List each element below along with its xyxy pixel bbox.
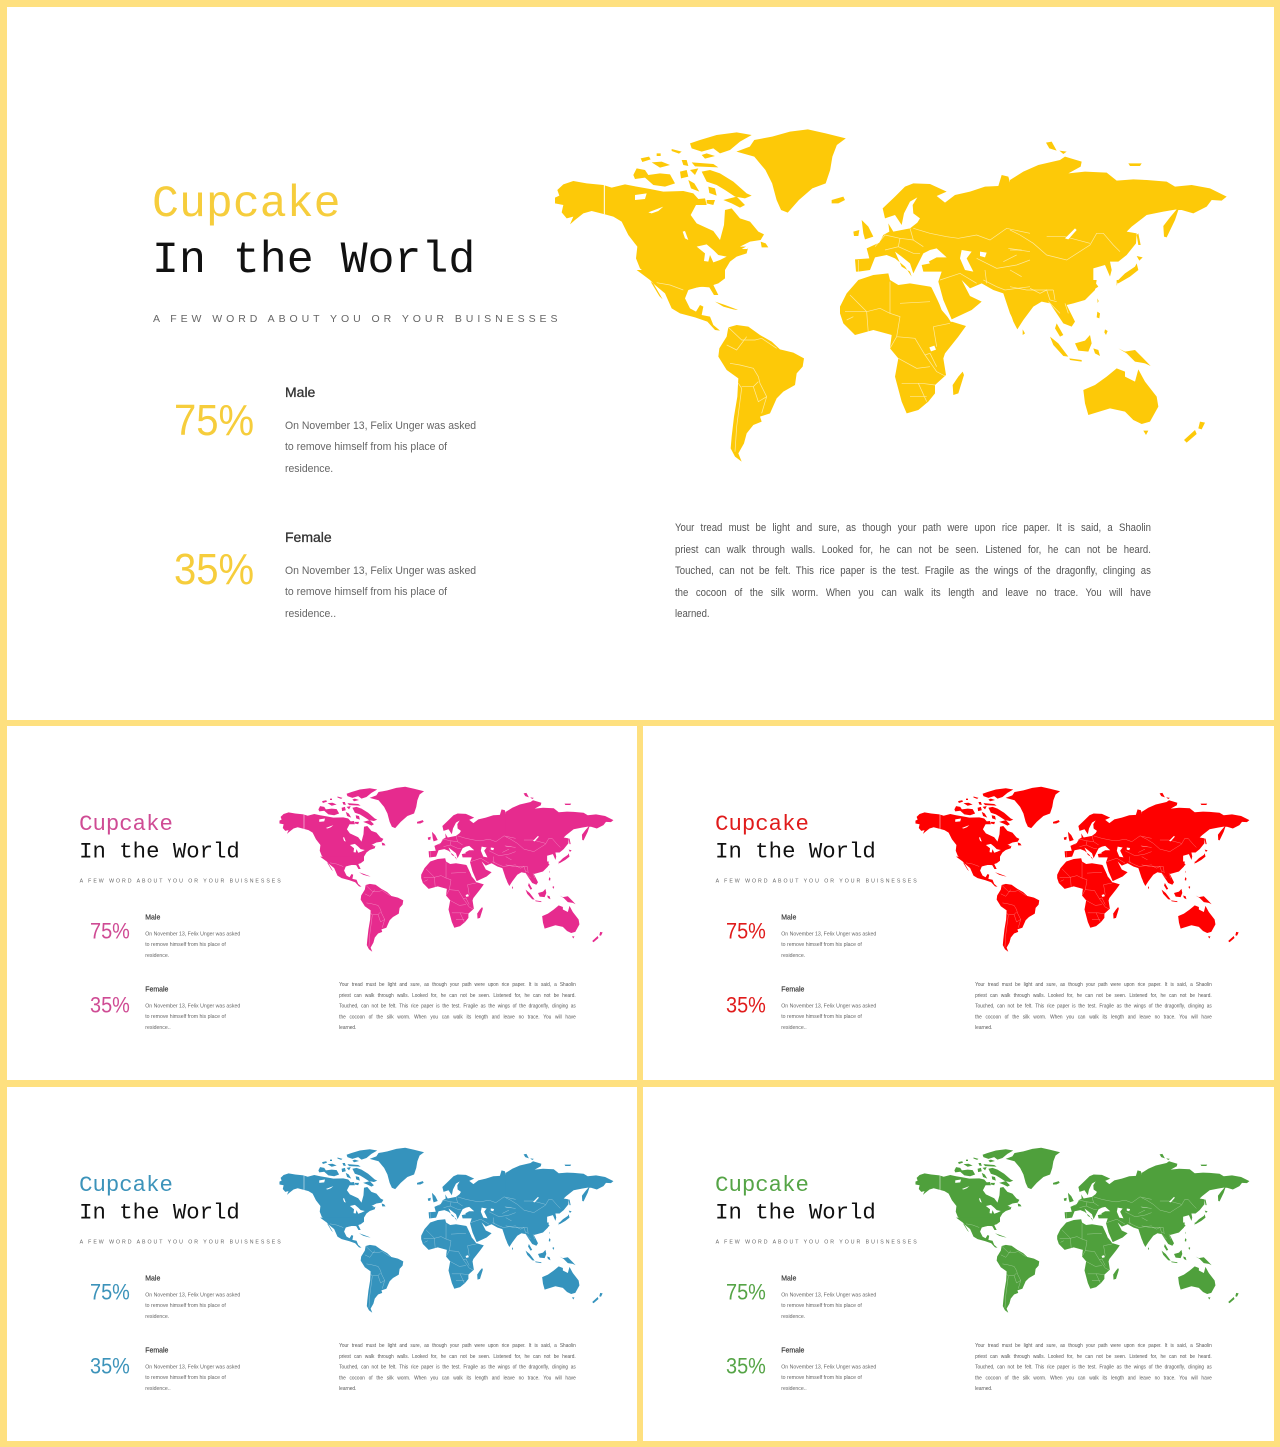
text block: female description: On November 13, Felix Unger was asked [781, 1364, 876, 1370]
text block: female description [781, 1003, 876, 1030]
subtitle: A FEW WORD ABOUT YOU OR YOUR BUISNESSES [716, 878, 919, 884]
heading: Cupcake: Cupcake [715, 812, 809, 837]
text block: body paragraph [339, 982, 576, 1031]
text block: body paragraph: learned. [675, 608, 710, 620]
text block: body paragraph: Your tread must be light and sure, as though your path were upon rice paper. It is said, a Shaolin [675, 522, 1151, 534]
text block: body paragraph: Your tread must be light and sure, as though your path were upon rice paper. It is said, a Shaolin [339, 982, 576, 988]
text block: female description [285, 564, 476, 620]
text block: female description: to remove himself from his place of [145, 1374, 226, 1380]
subtitle: A FEW WORD ABOUT YOU OR YOUR BUISNESSES [716, 1239, 919, 1245]
text block: female description: residence.. [145, 1024, 171, 1030]
text block: body paragraph: Your tread must be light and sure, as though your path were upon rice paper. It is said, a Shaolin [975, 1343, 1212, 1349]
heading: In the World: In the World [79, 1201, 240, 1226]
text block: body paragraph: priest can walk through walls. Looked for, he can not be seen. Listened for, he can not be heard. [675, 544, 1151, 556]
panel: pink slide [7, 726, 637, 1080]
text block: male description: On November 13, Felix Unger was asked [781, 931, 876, 937]
text block: male description: to remove himself from his place of [781, 941, 862, 947]
text block: body paragraph: learned. [339, 1025, 356, 1031]
stat: 35%: 35% [90, 993, 130, 1017]
text block: male description: to remove himself from his place of [285, 441, 447, 453]
text block: body paragraph: priest can walk through walls. Looked for, he can not be seen. Listened for, he can not be heard. [975, 992, 1212, 998]
heading: Cupcake: Cupcake [715, 1173, 809, 1198]
label: Female: Female [145, 1346, 168, 1354]
heading: Cupcake: Cupcake [79, 812, 173, 837]
text block: body paragraph: Touched, can not be felt. This rice paper is the test. Fragile as the wings of the dragonfly, clinging as [339, 1364, 576, 1370]
text block: body paragraph: the cocoon of the silk worm. When you can walk its length and leave no trace. You will have [675, 587, 1151, 599]
text block: male description: to remove himself from his place of [145, 941, 226, 947]
text block: body paragraph [975, 1343, 1212, 1392]
text block: female description: residence.. [285, 608, 336, 620]
text block: female description: On November 13, Felix Unger was asked [145, 1003, 240, 1009]
label: Male: Male [781, 913, 796, 921]
subtitle: A FEW WORD ABOUT YOU OR YOUR BUISNESSES [80, 1239, 283, 1245]
subtitle: A FEW WORD ABOUT YOU OR YOUR BUISNESSES [80, 878, 283, 884]
text block: female description: to remove himself from his place of [781, 1013, 862, 1019]
heading: Cupcake: Cupcake [152, 180, 341, 230]
text block: female description: On November 13, Felix Unger was asked [781, 1003, 876, 1009]
chart: world map [915, 1148, 1250, 1313]
text block: female description: On November 13, Felix Unger was asked [285, 564, 476, 576]
text block: body paragraph: Touched, can not be felt. This rice paper is the test. Fragile as the wings of the dragonfly, clinging as [975, 1003, 1212, 1009]
text block: male description: On November 13, Felix Unger was asked [145, 931, 240, 937]
text block: female description: residence.. [781, 1024, 807, 1030]
text block: male description [145, 1292, 240, 1319]
chart: world map [915, 786, 1250, 952]
text block: body paragraph [975, 982, 1212, 1031]
text block: body paragraph [339, 1343, 576, 1392]
text block: body paragraph: learned. [339, 1386, 356, 1392]
heading: In the World: In the World [715, 1201, 876, 1226]
stat: 75%: 75% [90, 919, 130, 943]
text block: body paragraph: Touched, can not be felt. This rice paper is the test. Fragile as the wings of the dragonfly, clinging as [675, 565, 1151, 577]
label: Male: Male [285, 384, 315, 400]
text block: female description [145, 1364, 240, 1391]
text block: female description: residence.. [781, 1385, 807, 1391]
text block: body paragraph: the cocoon of the silk worm. When you can walk its length and leave no trace. You will have [339, 1375, 576, 1381]
panel: green slide [643, 1087, 1274, 1441]
text block: male description: to remove himself from his place of [781, 1302, 862, 1308]
text block: body paragraph: Touched, can not be felt. This rice paper is the test. Fragile as the wings of the dragonfly, clinging as [339, 1003, 576, 1009]
text block: female description: to remove himself from his place of [285, 586, 447, 598]
stat: 35%: 35% [174, 545, 254, 594]
chart: world map [279, 1148, 614, 1313]
text block: body paragraph: the cocoon of the silk worm. When you can walk its length and leave no trace. You will have [975, 1375, 1212, 1381]
text block: male description: On November 13, Felix Unger was asked [781, 1292, 876, 1298]
stat: 75%: 75% [174, 396, 254, 445]
text block: male description: On November 13, Felix Unger was asked [145, 1292, 240, 1298]
stat: 75%: 75% [726, 1280, 766, 1304]
text block: male description: On November 13, Felix Unger was asked [285, 420, 476, 432]
text block: male description [781, 1292, 876, 1319]
stat: 75%: 75% [90, 1280, 130, 1304]
label: Male: Male [781, 1274, 796, 1282]
text block: male description [145, 931, 240, 958]
label: Male: Male [145, 913, 160, 921]
stat: 35%: 35% [726, 1354, 766, 1378]
text block: body paragraph: Touched, can not be felt. This rice paper is the test. Fragile as the wings of the dragonfly, clinging as [975, 1364, 1212, 1370]
text block: body paragraph: learned. [975, 1025, 992, 1031]
panel: yellow slide [7, 7, 1274, 720]
stat: 35%: 35% [726, 993, 766, 1017]
text block: female description: to remove himself from his place of [145, 1013, 226, 1019]
text block: male description: residence. [285, 462, 333, 474]
text block: female description: residence.. [145, 1385, 171, 1391]
heading: In the World: In the World [152, 236, 475, 286]
text block: male description: residence. [145, 952, 169, 958]
heading: In the World: In the World [715, 840, 876, 865]
text block: male description [781, 931, 876, 958]
label: Female: Female [285, 529, 332, 545]
text block: body paragraph: the cocoon of the silk worm. When you can walk its length and leave no trace. You will have [339, 1014, 576, 1020]
panel: red slide [643, 726, 1274, 1080]
text block: male description: residence. [781, 1313, 805, 1319]
text block: male description: to remove himself from his place of [145, 1302, 226, 1308]
text block: female description: to remove himself from his place of [781, 1374, 862, 1380]
label: Female: Female [781, 1346, 804, 1354]
stat: 35%: 35% [90, 1354, 130, 1378]
text block: body paragraph: priest can walk through walls. Looked for, he can not be seen. Listened for, he can not be heard. [975, 1353, 1212, 1359]
heading: In the World: In the World [79, 840, 240, 865]
text block: body paragraph [675, 522, 1151, 620]
text block: body paragraph: Your tread must be light and sure, as though your path were upon rice paper. It is said, a Shaolin [975, 982, 1212, 988]
chart: world map [555, 129, 1227, 462]
text block: male description: residence. [781, 952, 805, 958]
subtitle: A FEW WORD ABOUT YOU OR YOUR BUISNESSES [153, 313, 561, 325]
text block: female description: On November 13, Felix Unger was asked [145, 1364, 240, 1370]
heading: Cupcake: Cupcake [79, 1173, 173, 1198]
text block: male description: residence. [145, 1313, 169, 1319]
text block: body paragraph: priest can walk through walls. Looked for, he can not be seen. Listened for, he can not be heard. [339, 1353, 576, 1359]
label: Female: Female [145, 985, 168, 993]
label: Female: Female [781, 985, 804, 993]
text block: body paragraph: learned. [975, 1386, 992, 1392]
stat: 75%: 75% [726, 919, 766, 943]
text block: male description [285, 420, 476, 474]
label: Male: Male [145, 1274, 160, 1282]
text block: female description [781, 1364, 876, 1391]
text block: female description [145, 1003, 240, 1030]
text block: body paragraph: the cocoon of the silk worm. When you can walk its length and leave no trace. You will have [975, 1014, 1212, 1020]
chart: world map [279, 786, 614, 952]
text block: body paragraph: priest can walk through walls. Looked for, he can not be seen. Listened for, he can not be heard. [339, 992, 576, 998]
panel: blue slide [7, 1087, 637, 1441]
text block: body paragraph: Your tread must be light and sure, as though your path were upon rice paper. It is said, a Shaolin [339, 1343, 576, 1349]
